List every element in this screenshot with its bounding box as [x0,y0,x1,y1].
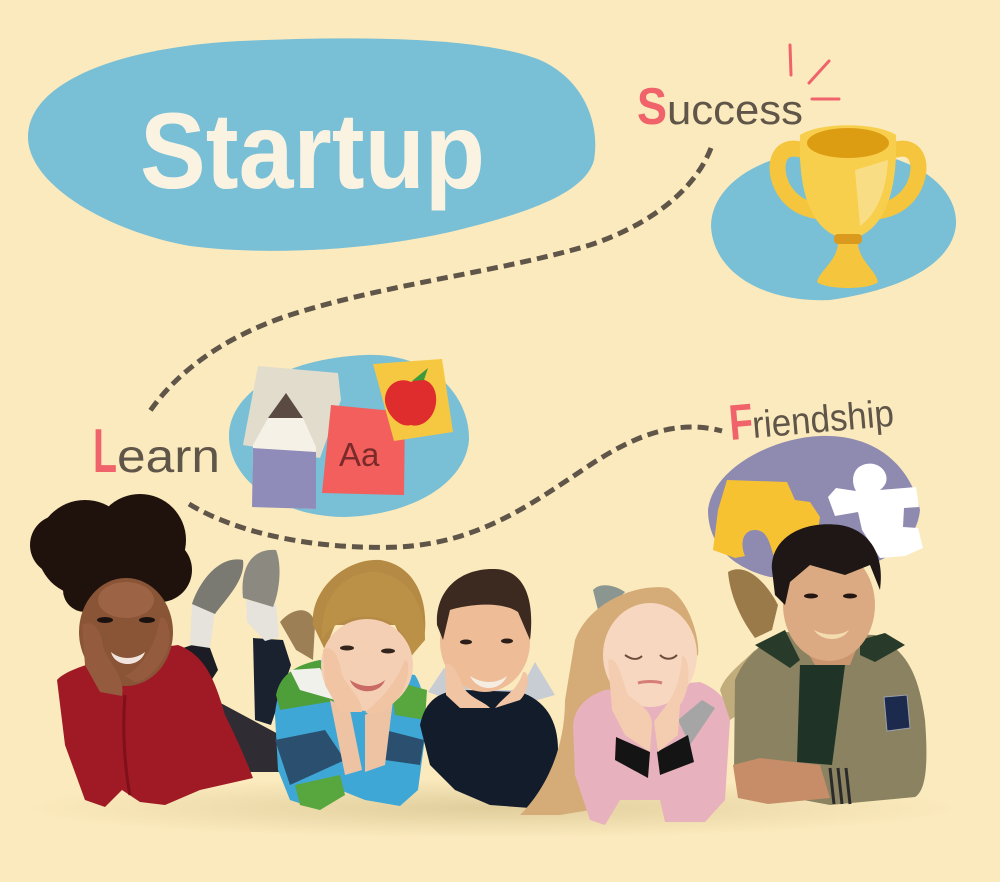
eyes [340,646,395,654]
icon: trophy [778,125,918,288]
closed eyes and mouth [625,655,677,683]
learn label [93,417,220,486]
hands [445,664,490,708]
neck [800,640,860,665]
forehead highlight [98,582,154,618]
smile [470,676,507,688]
shoe [728,569,778,638]
friendship label: riendship [750,393,896,447]
red sweater [57,645,253,807]
blue blob [711,150,956,300]
arms [330,700,362,775]
face [440,592,530,692]
eyes [804,594,857,598]
friendship label [727,381,896,451]
hair [437,569,531,640]
fringe [322,572,425,655]
smile [814,630,849,639]
striped sweater [275,660,427,810]
hands [323,648,362,712]
purple blob [708,436,920,577]
olive jacket [734,632,926,805]
sparkle lines [790,45,839,99]
face [783,549,875,661]
back leg [720,650,755,720]
success label: uccess [667,86,803,133]
child: girl with pink hoodie [520,585,730,825]
blue brush ellipse [28,38,595,251]
success label: S [637,78,667,136]
striped cuff [830,768,850,804]
icon: letter card: Aa [339,436,380,473]
smile [111,652,145,664]
child: boy with black sweater [420,569,558,808]
dark shoulders [755,630,905,668]
arrow: dashed path learn to success [150,148,711,411]
friendship label: F [727,393,755,451]
hair [772,524,881,605]
panel: startup title [28,38,595,251]
sleeve patch [884,695,910,731]
hand and forearm [733,758,830,804]
hands [82,623,123,696]
panel: success [637,45,956,300]
pink hoodie [573,682,730,825]
dark zip panel [797,665,845,765]
feet and legs [183,550,315,772]
eyes [97,617,155,623]
child: boy with olive jacket [720,524,926,805]
cuffs [615,737,650,778]
hands and forearms [608,659,652,752]
learn label: earn [117,430,220,482]
blue blob [229,355,469,517]
child: boy with striped sweater [275,560,427,810]
smile [350,680,385,691]
title text: Startup [140,90,485,211]
face [603,603,697,707]
hair [313,560,425,658]
icon: white puzzle piece [828,464,923,558]
shoe [593,585,625,618]
grey collar [428,662,555,705]
success label [637,78,803,136]
panel: learn [93,355,469,517]
child: girl with red sweater [30,494,315,807]
eyes [460,638,513,644]
icon: yellow puzzle piece [713,480,820,560]
black sweater [420,690,558,808]
learn label: L [93,417,117,486]
hair [30,494,192,625]
icon: letter card [322,405,405,495]
group: children [30,494,926,825]
arrow: dashed path learn to friendship [189,427,722,547]
icon: pencil card [243,366,341,509]
long hair [520,587,698,815]
panel: friendship [708,381,923,577]
face [321,619,413,711]
floor shadow [20,778,960,838]
grey hood lining [678,700,715,745]
icon: apple card [373,359,453,441]
sleeve shading [124,695,130,795]
face [79,578,173,686]
